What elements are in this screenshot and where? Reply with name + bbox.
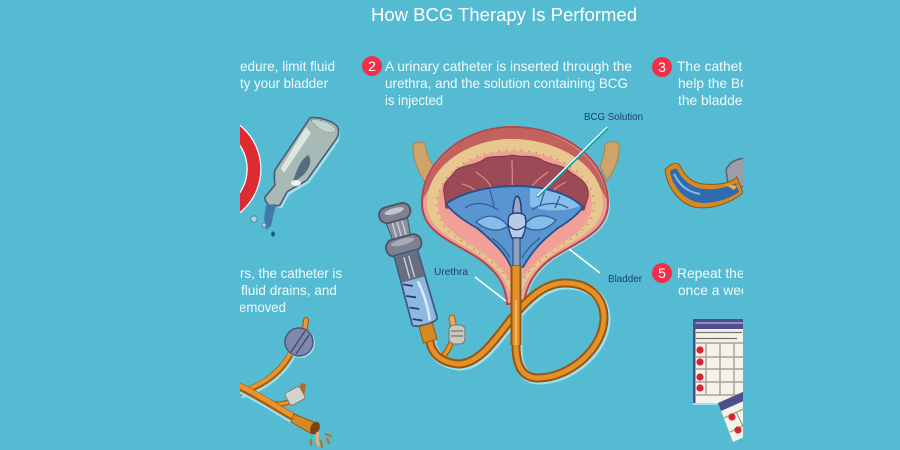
icon: calendar <box>693 319 743 442</box>
icon: syringe <box>375 201 448 346</box>
step 1 text: ty your bladder <box>240 76 328 91</box>
bladder illustration <box>422 127 610 306</box>
panel: step 3 <box>652 57 743 208</box>
label: Bladder <box>569 249 642 285</box>
icon: removed catheter <box>238 320 331 447</box>
step 4 text: emoved <box>239 300 286 315</box>
step 4 text: fluid drains, and <box>241 283 337 298</box>
catheter side port with clamp <box>449 318 465 344</box>
step 3 text: the bladder <box>678 93 747 108</box>
step 2 text: is injected <box>385 93 443 108</box>
label: BCG Solution: BCG Solution <box>584 111 643 123</box>
label: BCG Solution <box>537 111 643 197</box>
icon: catheter in blue <box>665 158 750 208</box>
step 3 text: help the BCG <box>678 76 761 91</box>
label: Urethra: Urethra <box>434 266 468 278</box>
title: How BCG Therapy Is Performed <box>371 5 637 25</box>
icon: ureters <box>413 142 619 183</box>
step 2 badge <box>362 56 382 76</box>
step 5 badge <box>652 263 672 283</box>
panel: step 1 <box>240 57 743 448</box>
step 3 badge <box>652 57 672 77</box>
step 4 text: rs, the catheter is <box>240 266 342 281</box>
step 2 text: A urinary catheter is inserted through the <box>385 59 632 74</box>
icon: bottle pouring fluid <box>251 118 340 237</box>
panel: step 2 <box>362 56 643 380</box>
step 5 text <box>678 268 743 295</box>
step 3 badge: 3 <box>658 59 666 75</box>
BCG solution <box>446 186 583 270</box>
label: Urethra <box>434 266 506 301</box>
step 5 text: Repeat the <box>677 266 745 281</box>
step 2 text: urethra, and the solution containing BCG <box>385 76 628 91</box>
step 4 text <box>240 268 342 312</box>
step 3 text: The catheter <box>677 59 755 74</box>
step 2 badge: 2 <box>368 58 376 74</box>
icon: red ring <box>240 124 262 214</box>
step 3 text <box>677 61 743 105</box>
step 5 text: once a week <box>678 283 756 298</box>
label: Bladder: Bladder <box>608 273 642 285</box>
step 1 text: edure, limit fluid <box>240 59 335 74</box>
panel: step 5 <box>652 263 743 442</box>
catheter tube loop <box>430 266 606 380</box>
step 1 text <box>240 59 335 91</box>
step 5 badge: 5 <box>658 265 666 281</box>
step 2 text <box>385 59 632 108</box>
